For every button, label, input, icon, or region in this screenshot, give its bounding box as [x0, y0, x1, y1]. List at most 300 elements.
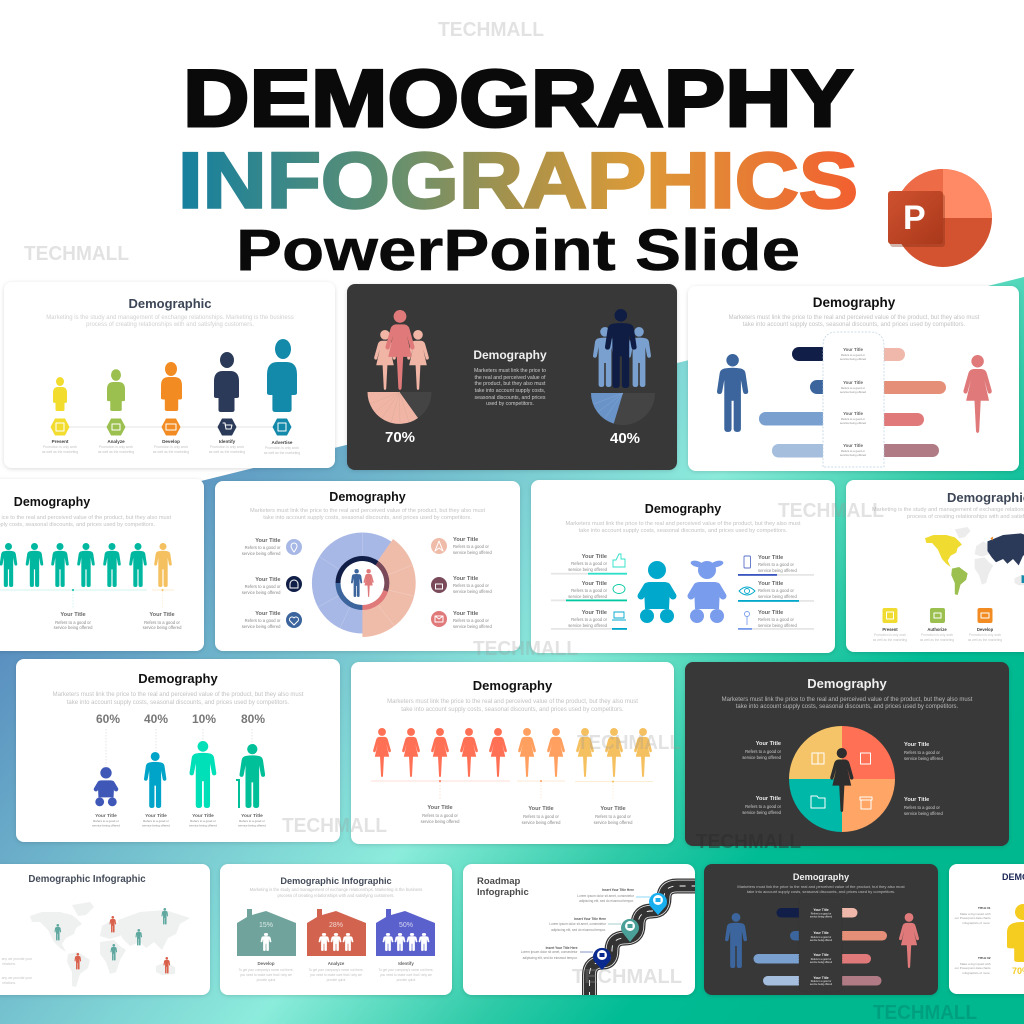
house: 28 percent: 28%	[329, 922, 343, 929]
panel: donut chart	[215, 481, 520, 651]
center card: Refers to a good or	[811, 958, 831, 961]
watermarks: TECHMALL	[282, 815, 387, 837]
labels: service being offered	[92, 824, 120, 828]
right labels: service being offered	[904, 756, 943, 761]
side text: relations.	[2, 962, 16, 966]
step labels	[42, 439, 300, 455]
subtitle: PowerPoint Slide: PowerPoint Slide	[236, 218, 800, 283]
labels: Refers to a good or	[595, 814, 632, 819]
watermarks: TECHMALL	[778, 500, 884, 522]
heading: Demography	[473, 348, 547, 362]
labels: Develop	[257, 961, 275, 966]
intro text: Marketers must link the price to the real and perceived value of the product, but they also must	[722, 697, 973, 703]
labels: Refers to a good or	[523, 814, 560, 819]
labels: you need to make sure that I why we	[310, 973, 362, 977]
icons: quadrants	[811, 753, 872, 809]
heading: Demography	[813, 295, 896, 310]
panel: row of women	[351, 662, 674, 844]
panel: babies	[531, 480, 835, 653]
icons: right circles	[431, 538, 447, 627]
intro text: Marketers must link the price to the real and perceived value of the product, but they also must	[729, 315, 980, 321]
watermarks: TECHMALL	[577, 732, 681, 754]
labels: Present	[882, 627, 898, 632]
values	[96, 712, 265, 726]
road labels: adipiscing elit, sed do eiusmod tempor.	[579, 899, 634, 903]
step labels: Develop	[162, 439, 180, 444]
figure: adult	[190, 741, 216, 808]
left rows: Your Title	[582, 610, 607, 616]
labels: Your Title	[600, 806, 626, 812]
left labels: Make a big impact with	[960, 962, 991, 966]
center card: service being offered	[810, 916, 833, 918]
body text	[474, 368, 546, 407]
panel: dark male female bars	[704, 864, 938, 995]
intro text: take into account supply costs, seasonal discounts, and prices used by competitors.	[263, 515, 472, 521]
step labels: Promotion is only work	[210, 445, 244, 449]
step labels: as well as the marketing	[264, 451, 300, 455]
labels: service being offered	[143, 625, 182, 630]
labels: as well as the marketing	[920, 638, 954, 642]
left labels: service being offered	[742, 755, 782, 760]
center dashed card: service being offered	[840, 357, 866, 361]
center dashed card: Your Title	[843, 380, 863, 385]
center dashed card: service being offered	[840, 453, 866, 457]
intro text	[250, 508, 485, 521]
pin: cyan	[649, 893, 667, 915]
icon: PowerPoint logo	[888, 169, 992, 267]
chart: five growing figures	[53, 339, 297, 412]
intro text: Marketers must link the price to the real and perceived value of the product, but they also must	[565, 521, 801, 527]
right rows: Your Title	[758, 581, 783, 587]
labels: service being offered	[189, 824, 217, 828]
left labels: Refers to a good or	[745, 749, 782, 754]
background: teal blue gradient shape	[0, 277, 1024, 1024]
center card: Your Title	[813, 976, 829, 980]
labels	[873, 627, 1002, 642]
value 70%: 70%	[385, 429, 415, 446]
labels: Refers to a good or	[422, 813, 459, 818]
right icons	[739, 556, 755, 625]
labels: Promotion is only work	[874, 633, 906, 637]
heading: Infographic	[477, 887, 529, 898]
labels: Refers to a good or	[93, 819, 119, 823]
icon: man	[725, 913, 747, 968]
intro text: process of creating relationships with and satisfying customers.	[277, 893, 395, 898]
figure: child	[144, 752, 166, 808]
labels: service being offered	[54, 625, 93, 630]
chart: bars	[754, 908, 887, 986]
house: 50 percent	[376, 909, 435, 956]
left labels: Refers to a good or	[245, 584, 281, 589]
step labels: Promotion is only work	[154, 445, 188, 449]
center card: Refers to a good or	[811, 980, 831, 983]
intro text	[53, 692, 304, 706]
side text	[2, 957, 33, 985]
title: Infographics: INFOGRAPHICS	[178, 136, 858, 224]
heading: Demography	[645, 502, 721, 516]
left labels: TITLE 01	[978, 906, 991, 910]
labels: To get your company's name out there,	[238, 968, 294, 972]
panel: partial yellow figure	[949, 864, 1024, 994]
center dashed card: Refers to a good or	[841, 386, 865, 390]
panel: row of men	[0, 479, 204, 651]
labels: you need to make sure that I why we	[380, 973, 432, 977]
labels: Promotion is only work	[921, 633, 953, 637]
icons: squares	[882, 608, 992, 623]
right labels: service being offered	[453, 624, 492, 629]
heading: Demography	[473, 678, 553, 693]
right labels: service being offered	[453, 550, 492, 555]
road labels: Insert Your Title Here	[602, 888, 634, 892]
heading: Demography	[807, 676, 887, 691]
intro text	[737, 884, 905, 894]
house: 50 percent: 50%	[399, 922, 413, 929]
left labels: Your Title	[255, 577, 280, 583]
watermarks: TECHMALL	[873, 1002, 977, 1024]
intro text: Marketers must link the price to the real and perceived value of the product, but they also must	[387, 699, 638, 705]
figures: seven people	[0, 543, 172, 587]
left labels: Your Title	[756, 741, 781, 747]
watermarks: TECHMALL	[24, 243, 129, 265]
left rows: Refers to a good or	[571, 561, 608, 566]
right labels: Refers to a good or	[453, 618, 489, 623]
intro text	[722, 697, 973, 710]
labels: Your Title	[192, 813, 214, 819]
labels: Your Title	[528, 806, 554, 812]
chart: 70 percent fan	[368, 392, 432, 424]
intro text: take into account supply costs, seasonal discounts, and prices used by competitors.	[743, 322, 966, 328]
labels: service being offered	[142, 824, 170, 828]
labels	[92, 813, 266, 828]
right labels: Refers to a good or	[904, 805, 940, 810]
right rows: service being offered	[758, 594, 797, 599]
watermarks: TECHMALL	[473, 638, 578, 660]
values: 40%	[144, 712, 168, 726]
values: 80%	[241, 712, 265, 726]
step labels: as well as the marketing	[42, 450, 78, 454]
intro text: process of creating relationships with and satisfying customers.	[86, 322, 254, 328]
figure: baby girl	[690, 559, 724, 623]
left labels: Refers to a good or	[745, 804, 782, 809]
side text: any we provide your	[2, 976, 33, 980]
intro text	[250, 887, 422, 898]
panel: male female bars	[688, 286, 1019, 471]
center card: Your Title	[813, 953, 829, 957]
watermarks: TECHMALL	[572, 966, 682, 988]
figure: baby	[95, 767, 117, 806]
center dashed card: service being offered	[840, 390, 866, 394]
left labels: TITLE 02	[978, 956, 991, 960]
right rows: Refers to a good or	[758, 562, 794, 567]
labels: To get your company's name out there,	[308, 968, 364, 972]
left labels: our Powerpoint data charts	[955, 916, 991, 920]
center dashed card: Refers to a good or	[841, 417, 865, 421]
step labels: as well as the marketing	[98, 450, 134, 454]
left labels: infographics of more.	[962, 921, 991, 925]
intro text: Marketers must link the price to the real and perceived value of the product, but they also must	[250, 508, 485, 514]
panel: demographic height steps	[4, 282, 335, 468]
chart: 40 percent fan	[591, 393, 655, 425]
heading: Roadmap	[477, 876, 520, 887]
right labels	[904, 742, 943, 816]
side text: any we provide your	[2, 957, 33, 961]
center card: service being offered	[810, 983, 833, 986]
left labels: Your Title	[255, 538, 280, 544]
labels: Refers to a good or	[190, 819, 216, 823]
figures: ten women	[373, 728, 652, 777]
intro text	[872, 507, 1024, 520]
right rows: service being offered	[758, 568, 797, 573]
left labels	[742, 741, 782, 815]
panel: world map with people	[0, 864, 210, 995]
step labels: Promotion is only work	[99, 445, 133, 449]
center card: service being offered	[810, 939, 833, 942]
chart: four quadrant pie	[789, 726, 895, 832]
right labels: service being offered	[453, 589, 492, 594]
road labels: Insert Your Title Here	[574, 917, 606, 921]
chart: colored world map	[925, 527, 1024, 595]
labels: service being offered	[594, 820, 633, 825]
intro text	[387, 699, 638, 713]
left rows: service being offered	[568, 567, 608, 572]
panel: world map partial	[846, 480, 1024, 652]
icon: woman	[963, 355, 992, 433]
labels: Analyze	[328, 961, 345, 966]
labels: service being offered	[421, 819, 460, 824]
labels	[54, 612, 182, 630]
intro text: take into account supply costs, seasonal discounts, and prices used by competitors.	[736, 704, 959, 710]
road	[590, 886, 697, 998]
left rows	[551, 554, 627, 630]
left labels: infographics of more.	[962, 971, 991, 975]
heading: Demography	[793, 872, 850, 882]
right labels: Your Title	[904, 797, 929, 803]
intro text: take into account supply costs, seasonal discounts, and prices used by competitors.	[579, 528, 788, 534]
figures: women	[374, 310, 429, 390]
road labels: adipiscing elit, sed do eiusmod tempor.	[523, 956, 578, 960]
center dashed card: Your Title	[843, 347, 863, 352]
intro text: take into account supply costs, seasonal discounts, and prices used by competitors.	[747, 889, 895, 894]
icon: man	[717, 354, 748, 432]
body text: take into account supply costs,	[475, 388, 545, 394]
left labels: our Powerpoint data charts	[955, 966, 991, 970]
labels: Refers to a good or	[143, 819, 169, 823]
intro text	[565, 521, 801, 534]
right rows	[738, 555, 814, 630]
left labels	[955, 906, 991, 975]
step labels: Present	[52, 439, 69, 444]
labels: Refers to a good or	[239, 819, 265, 823]
left labels: Make a big impact with	[960, 912, 991, 916]
heading: Demographic	[128, 296, 212, 311]
left icons	[612, 554, 626, 620]
left labels: service being offered	[742, 810, 782, 815]
center card: service being offered	[810, 961, 833, 964]
labels: Your Title	[149, 612, 175, 618]
left labels	[242, 538, 281, 629]
right labels: Refers to a good or	[453, 544, 489, 549]
left labels: service being offered	[242, 551, 281, 556]
intro text: take into account supply costs, seasonal discounts, and prices used by competitors.	[401, 707, 624, 713]
intro text: ice to the real and perceived value of the product, but they also must	[2, 515, 171, 521]
left rows: Refers to a good or	[571, 588, 608, 593]
panel: dark 70 percent and 40 percent	[347, 284, 677, 470]
watermarks: TECHMALL	[438, 19, 544, 41]
step labels: Identify	[219, 439, 236, 444]
right labels: Refers to a good or	[453, 583, 489, 588]
road labels: Lorem ipsum dolor sit amet, consectetur	[521, 950, 578, 954]
road labels: Lorem ipsum dolor sit amet, consectetur	[549, 922, 607, 926]
pin: navy	[593, 948, 611, 970]
labels: Your Title	[427, 805, 453, 811]
house: 15 percent	[237, 909, 296, 956]
labels: provide quick	[397, 978, 416, 982]
center card: Refers to a good or	[811, 936, 831, 939]
labels: Promotion is only work	[969, 633, 1001, 637]
center dashed card: Refers to a good or	[841, 353, 865, 357]
labels: provide quick	[327, 978, 346, 982]
pin: teal	[621, 919, 639, 942]
center card: Your Title	[813, 908, 829, 912]
left labels: Refers to a good or	[245, 545, 281, 550]
labels: service being offered	[238, 824, 266, 828]
labels: as well as the marketing	[968, 638, 1002, 642]
labels: Identify	[398, 961, 414, 966]
map figures	[54, 908, 170, 974]
left rows: Your Title	[582, 554, 607, 560]
center card	[799, 897, 842, 992]
road labels: Lorem ipsum dolor sit amet, consectetur	[577, 894, 635, 898]
center dashed card: service being offered	[840, 421, 866, 425]
left labels: service being offered	[242, 590, 281, 595]
heading: Demographic Infographic	[280, 876, 392, 886]
figure: baby boy	[640, 561, 674, 623]
left labels: Your Title	[756, 796, 781, 802]
labels: Develop	[977, 627, 994, 632]
road labels: adipiscing elit, sed do eiusmod tempor.	[551, 928, 606, 932]
heading: Demography	[14, 495, 90, 509]
right rows: Your Title	[758, 555, 783, 561]
right labels: Your Title	[453, 611, 478, 617]
left rows: Your Title	[582, 581, 607, 587]
center dashed card: Your Title	[843, 443, 863, 448]
right labels: service being offered	[904, 811, 943, 816]
value 40%: 40%	[610, 430, 640, 447]
right labels: Your Title	[904, 742, 929, 748]
right rows: Refers to a good or	[758, 588, 794, 593]
values: 60%	[96, 712, 120, 726]
icons: left circles	[286, 539, 302, 628]
panel: roadmap	[463, 864, 697, 998]
heading	[477, 876, 529, 898]
step labels: as well as the marketing	[153, 450, 189, 454]
labels: you need to make sure that I why we	[240, 973, 292, 977]
intro text: take into account supply costs, seasonal discounts, and prices used by competitors.	[67, 700, 290, 706]
labels: Your Title	[241, 813, 263, 819]
icon: woman	[899, 913, 919, 968]
intro text: Marketing is the study and management of exchange relationships. Marketing is the business	[46, 315, 294, 321]
values: 10%	[192, 712, 216, 726]
connector lines	[580, 897, 650, 952]
road labels: Insert Your Title Here	[546, 946, 578, 950]
labels	[421, 805, 633, 825]
center card: Refers to a good or	[811, 912, 831, 916]
labels: Refers to a good or	[55, 620, 92, 625]
labels: provide quick	[257, 978, 276, 982]
left labels: service being offered	[242, 624, 281, 629]
labels: service being offered	[522, 820, 561, 825]
labels: Refers to a good or	[144, 620, 181, 625]
intro text	[0, 515, 171, 528]
step labels: Advertise	[272, 440, 293, 445]
chart: bars	[759, 347, 946, 458]
labels: Your Title	[95, 813, 117, 819]
figure: elder with cane	[236, 744, 265, 808]
right labels: Your Title	[453, 537, 478, 543]
right rows: service being offered	[758, 623, 797, 628]
right rows: Refers to a good or	[758, 617, 794, 622]
panel: dark pie chart	[685, 662, 1009, 846]
labels: To get your company's name out there,	[378, 968, 434, 972]
body text: the real and perceived value of	[475, 375, 546, 381]
body text: the product, but they also must	[475, 381, 546, 387]
figures: men	[593, 309, 651, 388]
step labels: Analyze	[107, 439, 125, 444]
step labels: Promotion is only work	[265, 446, 299, 450]
right labels: Refers to a good or	[904, 750, 940, 755]
left rows: service being offered	[568, 594, 608, 599]
left labels: Your Title	[255, 611, 280, 617]
icons: hexagons	[50, 418, 292, 436]
labels	[238, 961, 434, 982]
body text: seasonal discounts, and prices	[475, 395, 546, 401]
title: Demography: DEMOGRAPHY	[183, 54, 853, 144]
left labels: Refers to a good or	[245, 618, 281, 623]
panel: houses	[220, 864, 452, 995]
house: 15 percent: 15%	[259, 922, 273, 929]
chart: donut	[312, 532, 416, 637]
chart: gray world map	[30, 902, 190, 987]
step labels: as well as the marketing	[209, 450, 245, 454]
icon: PowerPoint logo: P	[903, 199, 926, 237]
heading: Demographic Infographic	[28, 874, 146, 885]
labels: Your Title	[60, 612, 86, 618]
heading: Demography	[329, 490, 406, 504]
intro text	[46, 315, 294, 328]
labels: Your Title	[145, 813, 167, 819]
right labels: Your Title	[453, 576, 478, 582]
step labels: Promotion is only work	[43, 445, 77, 449]
left rows: service being offered	[568, 623, 608, 628]
center card: Your Title	[813, 931, 829, 935]
labels: Authorize	[927, 627, 947, 632]
side text: relations.	[2, 981, 16, 985]
panel: life stages percent	[16, 659, 340, 842]
right labels	[453, 537, 492, 629]
labels: as well as the marketing	[873, 638, 907, 642]
center dashed card	[823, 332, 884, 467]
body text: Marketers must link the price to	[474, 368, 546, 374]
body text: used by competitors.	[486, 401, 534, 407]
heading: Demography	[138, 671, 218, 686]
watermarks: TECHMALL	[696, 831, 801, 853]
left rows: Refers to a good or	[571, 617, 608, 622]
right rows: Your Title	[758, 610, 783, 616]
center dashed card: Your Title	[843, 411, 863, 416]
intro text: Marketing is the study and management of exchange relationships. Marketing is the business	[250, 887, 422, 892]
intro text: Marketers must link the price to the real and perceived value of the product, but they also must	[53, 692, 304, 698]
house: 28 percent	[307, 909, 366, 956]
